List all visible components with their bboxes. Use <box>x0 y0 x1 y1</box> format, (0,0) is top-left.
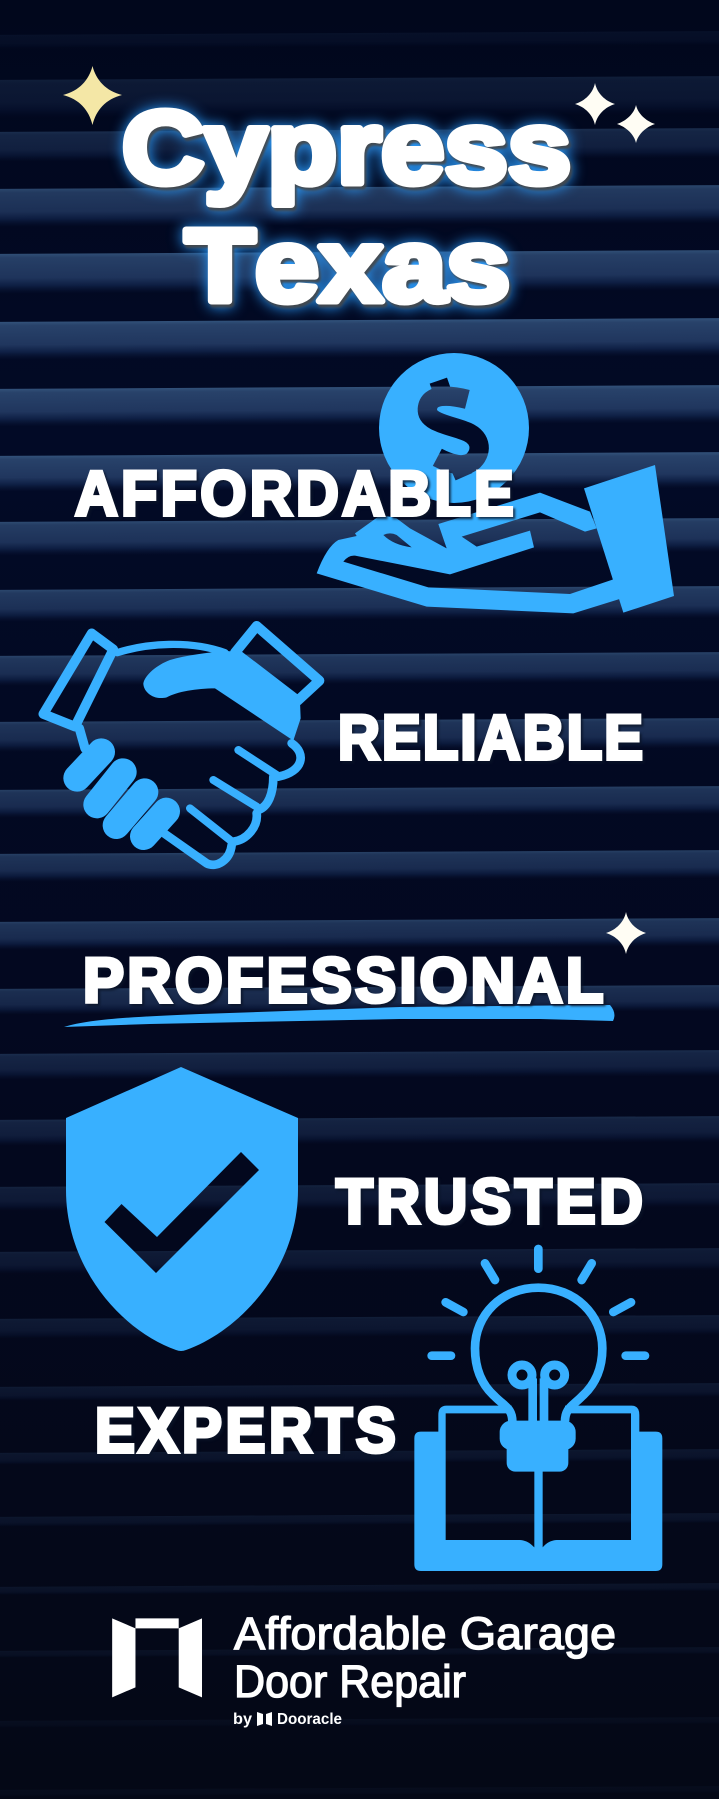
label: trusted: TRUSTED <box>336 1167 643 1237</box>
icon: coin and hand <box>317 353 674 613</box>
label: experts: EXPERTS <box>95 1395 396 1466</box>
icon: handshake <box>43 626 319 865</box>
sparkle: white upper <box>575 83 615 125</box>
bulb rays <box>432 1249 645 1356</box>
logo text: Dooracle <box>277 1711 342 1728</box>
logo text: by <box>233 1711 252 1728</box>
brush underline <box>64 1005 614 1027</box>
filament <box>512 1365 565 1422</box>
left fingers <box>77 752 101 778</box>
logo mark: door <box>112 1618 202 1697</box>
open book <box>414 1406 662 1571</box>
sparkle: white professional <box>606 912 646 954</box>
icon: open hand <box>317 465 674 613</box>
label: reliable: RELIABLE <box>338 702 643 773</box>
bulb outline <box>475 1288 602 1422</box>
icon: light bulb over book <box>414 1249 662 1571</box>
title <box>122 90 571 323</box>
logo text: Door Repair <box>234 1656 466 1707</box>
sparkle: white lower <box>617 105 655 143</box>
label: professional: PROFESSIONAL <box>83 946 603 1016</box>
logo text <box>233 1608 616 1728</box>
icon: dooracle mark <box>257 1712 272 1726</box>
sparkle: yellow <box>63 66 122 125</box>
right cuff <box>235 626 319 701</box>
left cuff and arm <box>43 626 319 865</box>
icon: shield with check <box>66 1067 298 1351</box>
finger outlines <box>278 743 301 777</box>
label: affordable: AFFORDABLE <box>75 458 514 528</box>
icon: dollar coin <box>379 353 529 503</box>
bulb base <box>500 1421 576 1472</box>
logo text: Affordable Garage <box>234 1608 616 1659</box>
thumb and wrist <box>143 651 301 741</box>
title: Texas <box>185 208 510 323</box>
title: Cypress <box>122 90 571 205</box>
